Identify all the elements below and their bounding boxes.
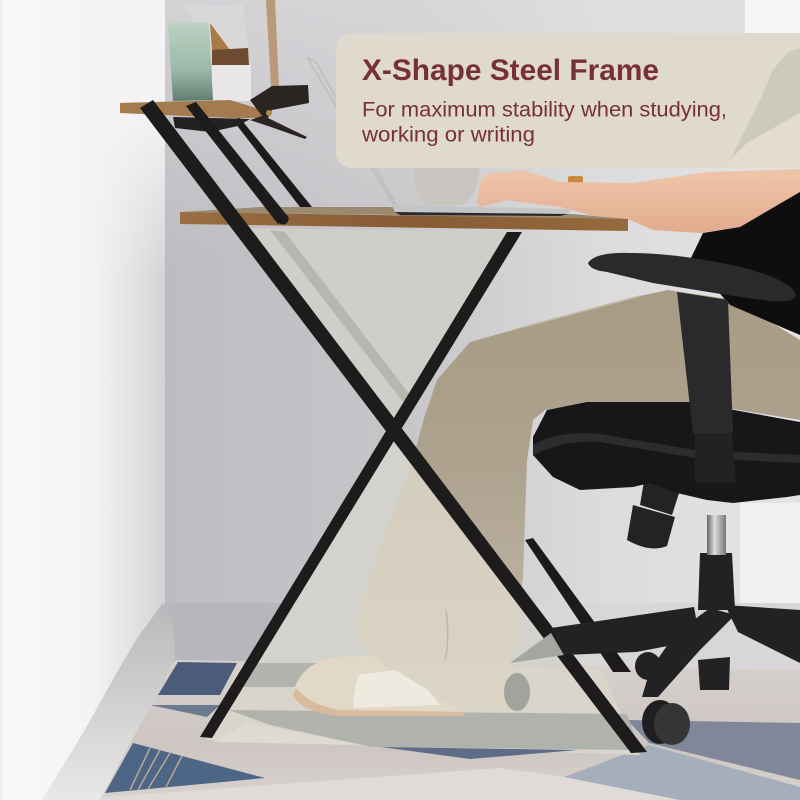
chair seat xyxy=(533,402,800,503)
chair caster xyxy=(642,700,690,745)
glass pane wall tint xyxy=(205,228,640,759)
shelf back leg xyxy=(232,118,312,207)
callout heading: X-Shape Steel Frame xyxy=(362,54,659,87)
mug xyxy=(413,168,480,205)
lamp clamp xyxy=(250,85,309,139)
info callout xyxy=(336,33,800,168)
pants xyxy=(357,290,800,712)
pants under glass xyxy=(357,464,520,712)
lamp stem xyxy=(266,0,279,86)
back table leg xyxy=(525,538,631,672)
chair cylinder xyxy=(707,515,726,555)
rug xyxy=(100,660,800,800)
shoe xyxy=(293,656,465,716)
left wall xyxy=(0,0,165,800)
chair base xyxy=(510,553,800,697)
silhouette through callout xyxy=(730,48,800,160)
upper shelf xyxy=(120,100,263,132)
laptop base xyxy=(392,205,572,216)
table top xyxy=(180,207,628,231)
laptop screen xyxy=(307,57,396,207)
arm and hand xyxy=(477,169,800,233)
skirting board xyxy=(165,603,800,671)
steel X frame xyxy=(140,100,647,753)
rear caster through glass xyxy=(504,673,530,711)
seat knob xyxy=(627,475,680,548)
desk fan xyxy=(168,22,213,101)
skin tone through callout xyxy=(720,113,800,168)
back wall xyxy=(160,0,800,620)
window glow xyxy=(740,0,800,610)
bracelet xyxy=(568,176,583,183)
callout body text: working or writing xyxy=(361,124,535,146)
callout body text: For maximum stability when studying, xyxy=(362,98,727,122)
candle jar xyxy=(185,5,251,101)
left baseboard xyxy=(42,603,175,800)
torso xyxy=(690,192,800,335)
rug blue triangle xyxy=(105,743,265,793)
chair armrest xyxy=(588,253,796,483)
